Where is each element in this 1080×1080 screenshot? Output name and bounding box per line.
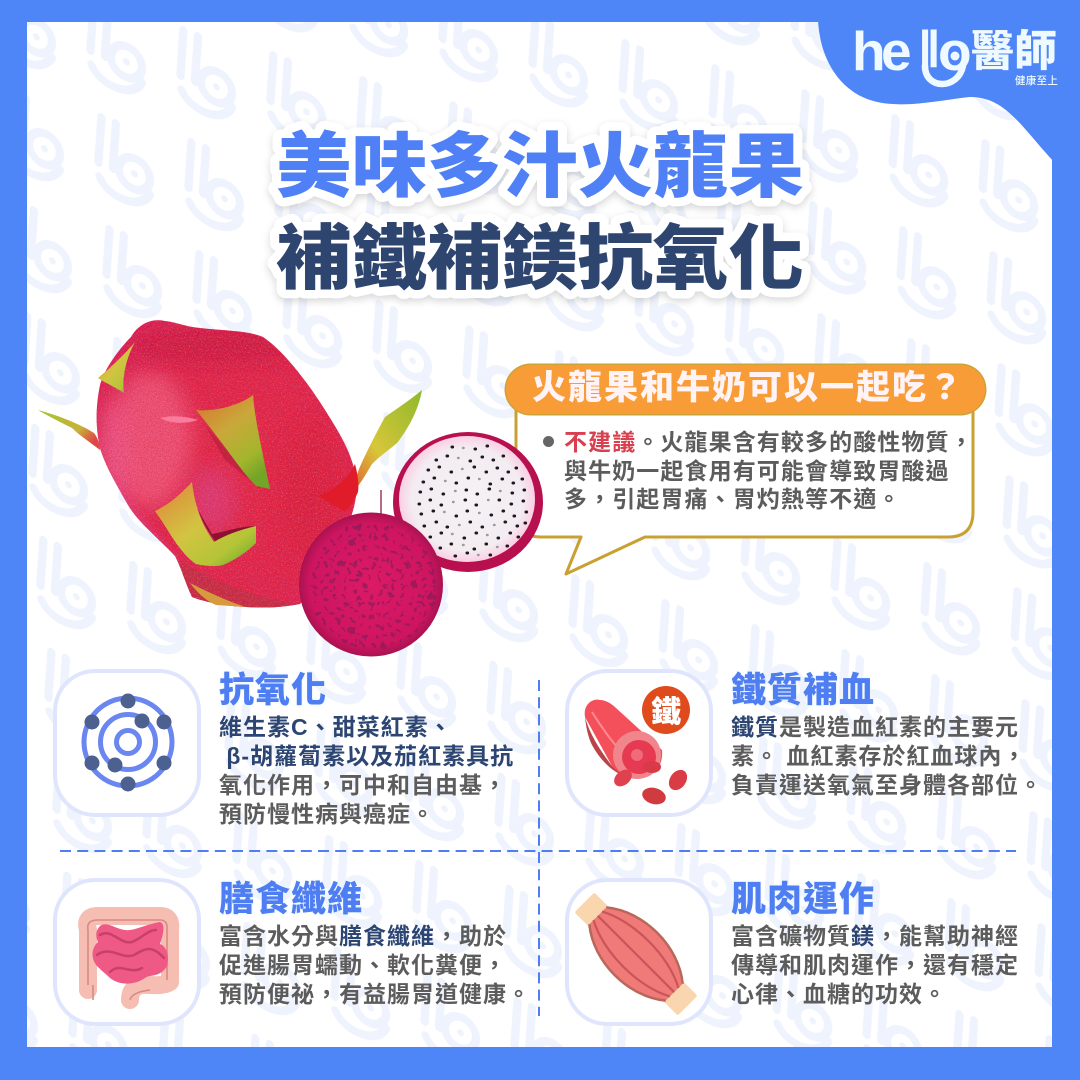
body: iron: 負責運送氧氣至身體各部位。	[731, 772, 1043, 798]
callout heading pill	[506, 365, 985, 414]
callout body text: 不建議。火龍果含有較多的酸性物質，	[564, 429, 974, 455]
logo: hello醫師: 醫師	[971, 17, 1057, 79]
white-flesh slice	[393, 432, 543, 572]
heading: iron: 鐵質補血	[731, 671, 875, 710]
logo corner blue shape	[818, 22, 1052, 160]
illustration: dragon fruit	[38, 320, 543, 656]
logo: hello醫師: he	[852, 20, 912, 82]
far left sepal	[38, 410, 100, 450]
body: dietary fibre: 富含水分與膳食纖維，助於	[219, 923, 507, 949]
heading: dietary fibre: 膳食纖維	[219, 880, 363, 919]
body: dietary fibre: 預防便祕，有益腸胃道健康。	[219, 981, 531, 1007]
callout body text: 與牛奶一起食用有可能會導致胃酸過	[564, 458, 950, 484]
callout body text: 多，引起胃痛、胃灼熱等不適。	[564, 486, 901, 512]
red fin near right	[318, 464, 358, 512]
right sepal	[350, 390, 422, 496]
title line 2: 補鐵補鎂抗氧化	[276, 202, 804, 304]
logo: hello醫師: l	[928, 22, 940, 79]
text panel: antioxidant	[219, 671, 514, 827]
body: muscle: 富含礦物質鎂，能幫助神經	[731, 923, 1019, 949]
lower sepal	[155, 482, 256, 566]
text panel: iron	[731, 671, 1043, 798]
icon card: antioxidant atom	[53, 669, 201, 817]
body: muscle: 心律、血糖的功效。	[731, 981, 947, 1007]
body: dietary fibre	[219, 923, 531, 1007]
callout heading pill: 火龍果和牛奶可以一起吃？	[532, 369, 964, 407]
icon card: intestines	[53, 878, 201, 1026]
logo: hello醫師: o	[938, 20, 972, 82]
body: dietary fibre: 促進腸胃蠕動、軟化糞便，	[219, 952, 507, 978]
dark shadow below centre sepal	[205, 425, 262, 490]
bottom sepal	[190, 583, 246, 607]
top-left sepal	[98, 342, 135, 393]
title line 1: 美味多汁火龍果	[276, 110, 804, 212]
title	[265, 110, 814, 304]
heading: antioxidant: 抗氧化	[219, 671, 327, 710]
body: antioxidant	[219, 714, 514, 827]
callout body text	[564, 429, 974, 512]
logo: hello醫師: l	[919, 22, 931, 79]
heading: muscle: 肌肉運作	[731, 880, 875, 919]
icon card: iron blood cells: 鐵	[651, 687, 681, 731]
logo: hello醫師	[852, 17, 1058, 88]
icon card: muscle	[565, 878, 713, 1026]
logo: hello醫師: 健康至上	[1015, 73, 1058, 88]
body: antioxidant: 維生素C、甜菜紅素、	[219, 714, 453, 740]
icon card: iron blood cells	[565, 669, 713, 817]
body: antioxidant: 預防慢性病與癌症。	[219, 801, 435, 827]
text panel: dietary fibre	[219, 880, 531, 1007]
text panel: muscle	[731, 880, 1019, 1007]
body: antioxidant: 氧化作用，可中和自由基，	[219, 772, 507, 798]
body: antioxidant: β-胡蘿蔔素以及茄紅素具抗	[226, 743, 514, 769]
body: iron: 鐵質是製造血紅素的主要元	[731, 714, 1019, 740]
body: iron	[731, 714, 1043, 798]
centre sepal	[196, 395, 270, 489]
speech bubble outline	[514, 410, 974, 576]
lower sepal shadow	[198, 510, 256, 542]
body: iron: 素。 血紅素存於紅血球內，	[731, 743, 1026, 769]
body: muscle: 傳導和肌肉運作，還有穩定	[731, 952, 1019, 978]
fruit body	[90, 315, 365, 615]
callout: dragon fruit with milk	[504, 364, 986, 576]
callout bullet dot	[543, 436, 554, 447]
red-flesh slice	[299, 490, 443, 656]
body: muscle	[731, 923, 1019, 1007]
